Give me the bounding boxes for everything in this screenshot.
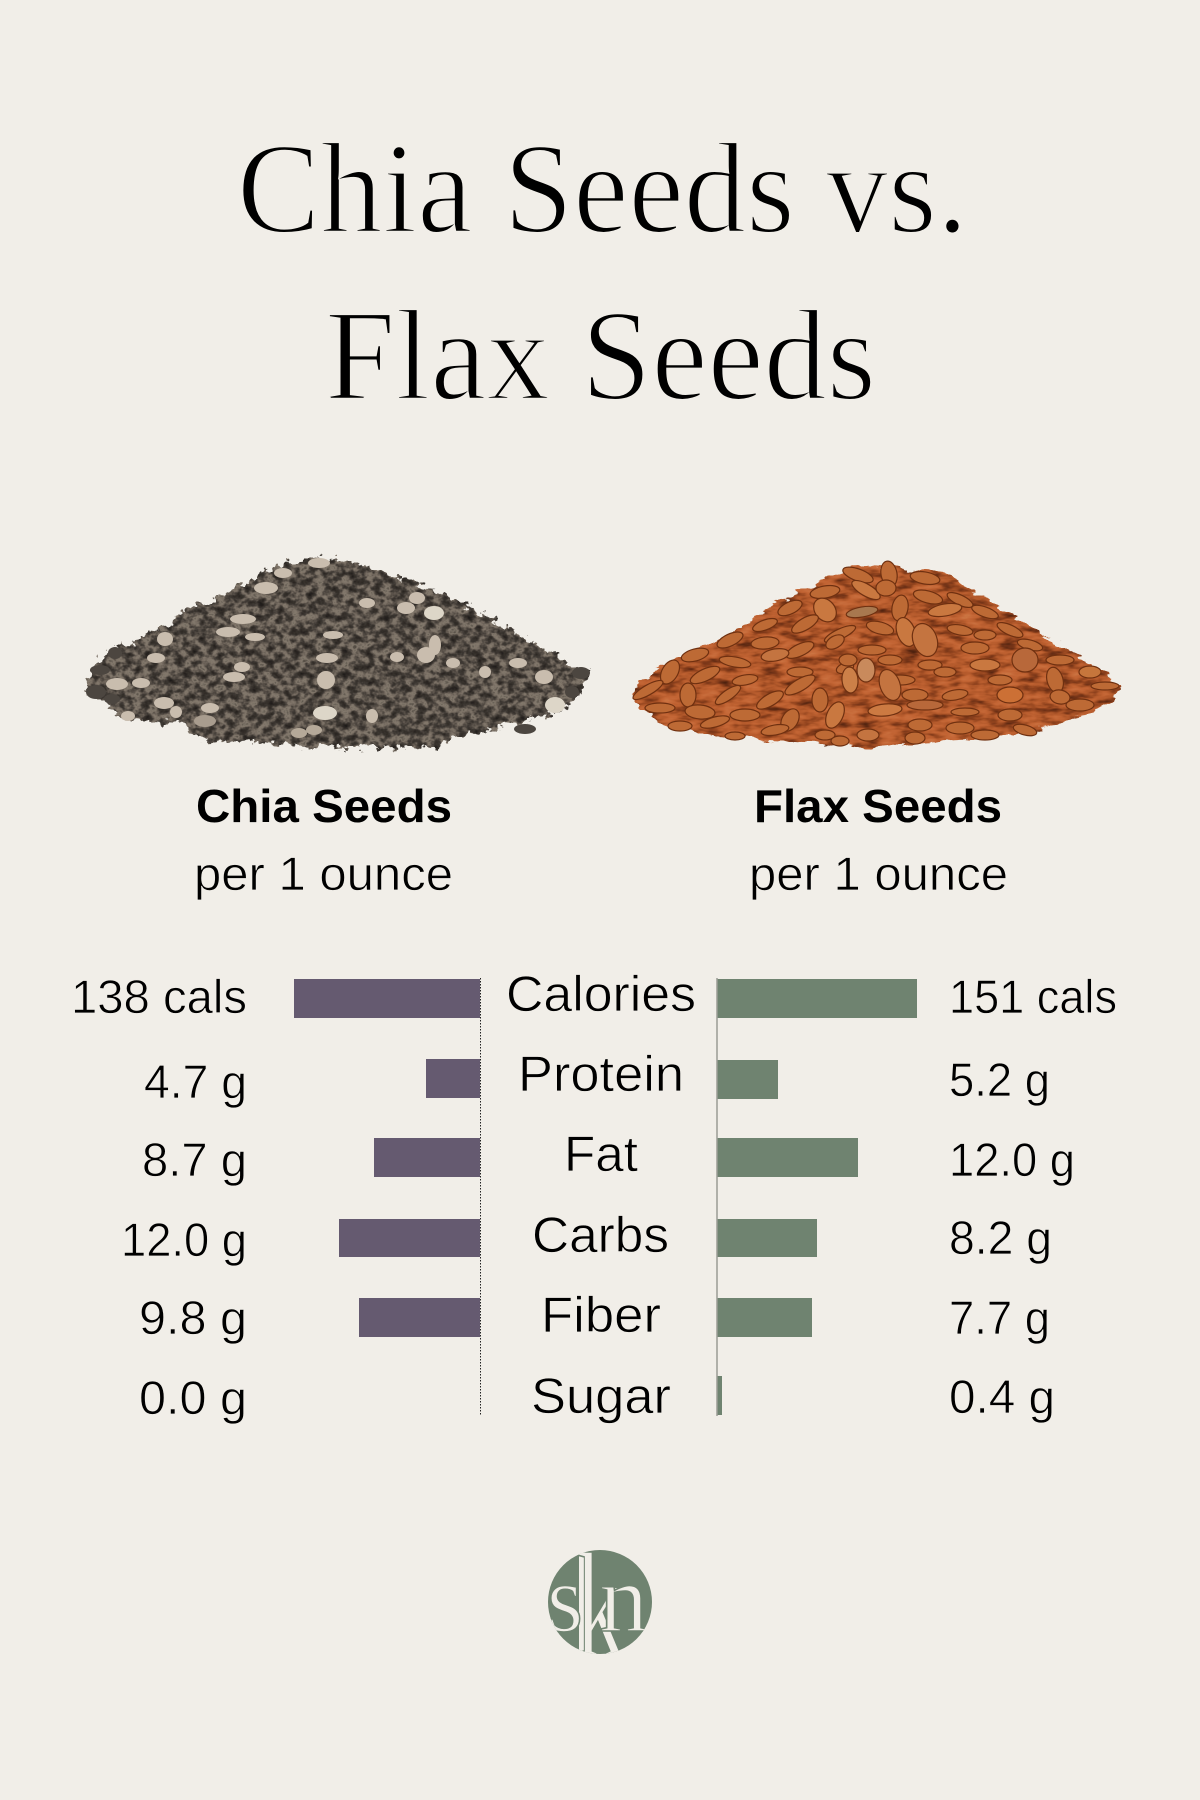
nutrient labels: [506, 966, 696, 1424]
chart: flax bars: [717, 978, 917, 1416]
chia values: 4.7 g: [144, 1055, 247, 1108]
chia values: 138 cals: [71, 970, 247, 1023]
title: Flax Seeds: [325, 284, 876, 428]
flax values: 7.7 g: [949, 1291, 1050, 1344]
image: flax seed pile: [631, 560, 1121, 748]
logo: s: [547, 1545, 583, 1652]
flax values: 8.2 g: [949, 1211, 1052, 1264]
flax values: 12.0 g: [949, 1133, 1075, 1186]
heading: flax seeds: per 1 ounce: [749, 847, 1008, 900]
chia values: 8.7 g: [142, 1133, 247, 1186]
chart: chia bars: [294, 978, 480, 1415]
image: chia seed pile: [85, 558, 590, 748]
title: Chia Seeds vs.: [237, 117, 968, 261]
nutrient labels: Fat: [564, 1126, 638, 1182]
heading: chia seeds: Chia Seeds: [196, 780, 452, 832]
nutrient labels: Carbs: [532, 1207, 669, 1263]
chia values: 9.8 g: [139, 1291, 247, 1344]
logo: n: [599, 1545, 648, 1652]
logo: [548, 1550, 652, 1654]
chia values: [71, 970, 247, 1424]
flax values: 151 cals: [949, 970, 1117, 1023]
flax values: [949, 970, 1117, 1423]
heading: flax seeds: Flax Seeds: [754, 780, 1002, 832]
nutrient labels: Protein: [518, 1046, 684, 1102]
logo: k: [576, 1523, 624, 1689]
nutrient labels: Sugar: [531, 1368, 671, 1424]
heading: chia seeds: per 1 ounce: [194, 847, 453, 900]
nutrient labels: Fiber: [541, 1287, 661, 1343]
flax values: 5.2 g: [949, 1053, 1050, 1106]
chia values: 0.0 g: [139, 1371, 247, 1424]
title: [237, 117, 968, 428]
heading: chia seeds: [194, 780, 453, 900]
chia values: 12.0 g: [121, 1213, 247, 1266]
heading: flax seeds: [749, 780, 1008, 900]
flax values: 0.4 g: [949, 1370, 1055, 1423]
nutrient labels: Calories: [506, 966, 696, 1022]
